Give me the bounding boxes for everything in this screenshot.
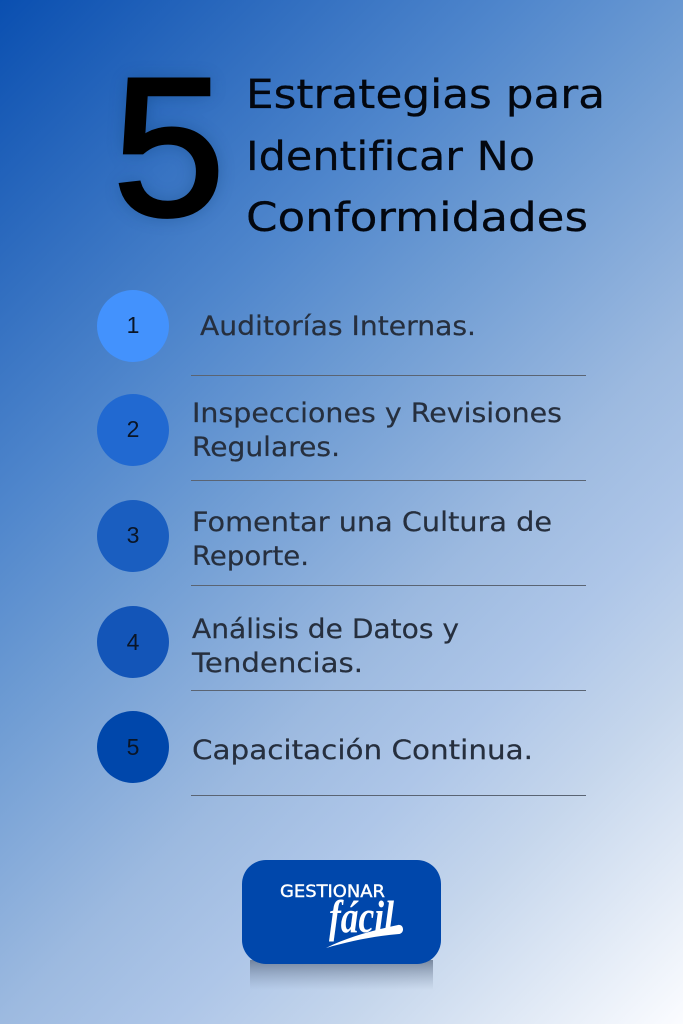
item 2: [97, 394, 586, 480]
number badge 4: [97, 606, 169, 678]
item text 1: Auditorías Internas.: [200, 311, 476, 342]
item text 2: [192, 398, 562, 463]
item 1: [97, 290, 586, 376]
item text 3: Fomentar una Cultura de: [192, 507, 552, 538]
item text 3: Reporte.: [192, 541, 309, 572]
item text 5: Capacitación Continua.: [192, 735, 533, 766]
item text 4: [191, 614, 459, 679]
item text 3: [192, 507, 552, 572]
logo wordmark: fácil: [329, 891, 394, 942]
item text 2: Regulares.: [192, 432, 340, 463]
logo wordmark: GESTIONAR: [280, 882, 385, 902]
logo reflection: [250, 960, 433, 990]
number badge 5: [97, 711, 169, 783]
heading text: Estrategias para: [246, 72, 605, 118]
item text 4: Tendencias.: [191, 648, 363, 679]
number badge 2: 2: [127, 416, 139, 442]
big number five: 5: [113, 38, 225, 258]
number badge 2: [97, 394, 169, 466]
number badge 3: 3: [127, 522, 139, 548]
number badge 1: [97, 290, 169, 362]
number badge 5: 5: [127, 734, 139, 760]
item text 2: Inspecciones y Revisiones: [192, 398, 562, 429]
logo panel: [242, 860, 441, 964]
number badge 3: [97, 500, 169, 572]
logo: Gestionar Fácil: [242, 860, 441, 990]
item 3: [97, 500, 586, 586]
title block: [113, 38, 605, 258]
item 4: [97, 606, 586, 690]
heading text: Conformidades: [246, 195, 588, 241]
heading text: [246, 72, 605, 241]
number badge 1: 1: [127, 312, 139, 338]
heading text: Identificar No: [246, 134, 535, 180]
item 5: [97, 711, 586, 796]
item text 4: Análisis de Datos y: [192, 614, 459, 645]
number badge 4: 4: [127, 629, 140, 655]
logo wordmark: [280, 882, 403, 948]
big number five: 5: [113, 38, 225, 258]
